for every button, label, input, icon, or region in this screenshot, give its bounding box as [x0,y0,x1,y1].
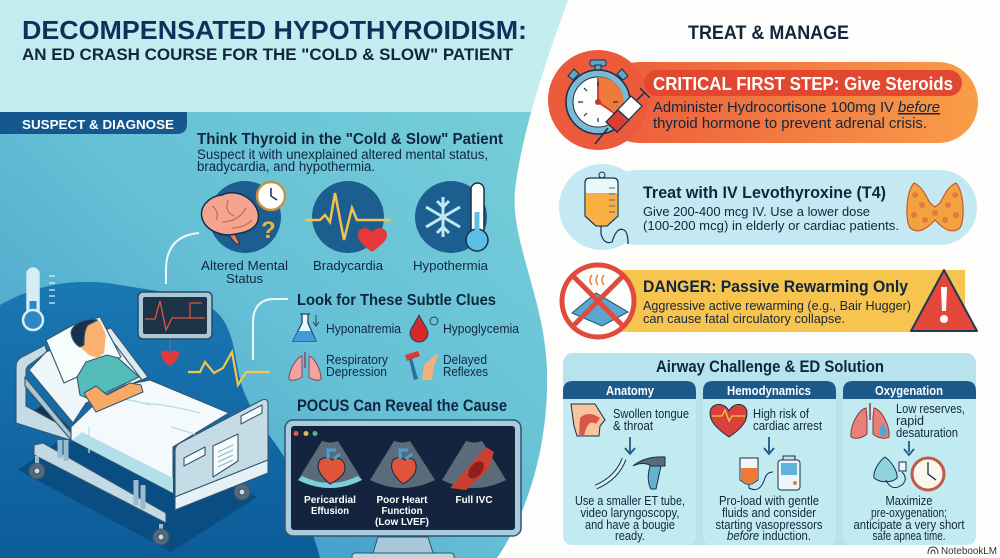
patient torso and head [77,355,139,398]
heading: treat and manage: TREAT & MANAGE [688,23,849,44]
column: anatomy: Swollen tongue [613,407,689,421]
clue list: Reflexes [443,364,488,379]
column: oxygenation: Maximize [886,494,933,508]
patient arm over blanket [84,383,143,412]
ultrasound labels: Pericardial [304,494,356,506]
column: anatomy: & throat [613,419,653,433]
panel: levothyroxine: Treat with IV Levothyroxine (T4) [643,183,886,202]
clue list: Respiratory [326,352,388,367]
column: oxygenation: desaturation [896,426,958,440]
arrow [764,437,774,454]
title: DECOMPENSATED HYPOTHYROIDISM: [22,15,527,45]
column: hemodynamics: Hemodynamics [727,384,811,398]
symptom labels: Status [226,271,263,286]
column: hemodynamics: fluids and consider [722,506,816,520]
icon: altered mental status: ? [261,217,276,244]
ultrasound view: pericardial effusion [298,441,362,488]
panel: levothyroxine [559,164,977,250]
arrow [625,437,635,454]
panel: levothyroxine: Give 200-400 mcg IV. Use a lower dose [643,204,870,219]
icon: heart with pulse [710,404,747,437]
icon: clock [912,458,944,490]
column: oxygenation: safe apnea time. [872,529,946,543]
clue list [289,314,520,380]
illustration: patient in hospital bed [16,317,268,552]
column: oxygenation: pre-oxygenation; [871,506,947,520]
heading: POCUS: POCUS Can Reveal the Cause [297,397,507,415]
column: anatomy: and have a bougie [585,518,675,532]
blanket [71,380,229,493]
icon: laryngoscope [633,457,665,489]
icon: thyroid gland [907,183,963,231]
clue list: Hypoglycemia [443,321,520,336]
panel: critical first step: Administer Hydrocortisone 100mg IV before [653,99,940,116]
heading: think thyroid: Suspect it with unexplained altered mental status, [197,147,488,162]
panel: critical first step: thyroid hormone to prevent adrenal crisis. [653,115,927,132]
head rail [16,345,70,440]
icon: ET tube [596,459,624,487]
clue list: Depression [326,364,387,379]
ultrasound view: poor heart function [370,441,435,488]
connector lines [166,233,288,360]
ultrasound labels: (Low LVEF) [375,516,429,528]
column: hemodynamics [703,381,836,545]
column: oxygenation: Oxygenation [875,384,943,398]
NotebookLM mark: NotebookLM [941,545,997,557]
footboard [175,400,268,497]
column: anatomy: video laryngoscopy, [580,506,680,520]
heading: think thyroid: bradycardia, and hypothermia. [197,159,375,174]
clue list: Hyponatremia [326,321,402,336]
bed base frame [34,443,166,523]
icon: flask [293,314,319,341]
icon: lungs [289,352,321,380]
panel: levothyroxine: (100-200 mcg) in elderly or cardiac patients. [643,218,899,233]
section banner: suspect and diagnose [0,112,187,134]
column: anatomy [563,381,696,545]
icon: prohibited rewarming blanket [562,265,634,337]
icon: hypothermia [415,181,488,253]
heading: subtle clues: Look for These Subtle Clues [297,292,496,309]
under-bed dark gap [29,403,70,438]
pillow [46,317,121,383]
panel: critical first step [548,50,978,150]
ultrasound labels: Full IVC [456,494,493,506]
panel: danger: Aggressive active rewarming (e.g., Bair Hugger) [643,298,911,313]
panel: danger [562,265,977,337]
symptom labels [201,258,489,286]
column: anatomy: Anatomy [606,384,654,398]
backrest mattress [29,328,148,423]
symptom labels: Hypothermia [413,258,489,273]
column: hemodynamics: Pro-load with gentle [719,494,819,508]
heading: think thyroid [197,131,504,174]
icon: airway profile [571,404,605,436]
column: hemodynamics: High risk of [753,407,809,421]
icon: IV fluids to vasopressor pump [740,456,800,490]
clue list: Delayed [443,352,487,367]
ultrasound labels [304,494,493,528]
clipboard [213,434,238,477]
icon: lungs with drop [851,403,889,438]
icon: IV bag [585,172,628,244]
title: AN ED CRASH COURSE FOR THE "COLD & SLOW" PATIENT [22,45,514,64]
ecg trace [188,352,270,385]
column: oxygenation [843,381,976,545]
backrest frame [25,377,71,440]
ultrasound labels: Poor Heart [376,494,428,506]
column: anatomy: ready. [615,529,645,543]
heading: think thyroid: Think Thyroid in the "Cold & Slow" Patient [197,131,504,148]
column: oxygenation: rapid [896,414,924,428]
column: oxygenation: anticipate a very short [854,518,965,532]
panel: airway challenge and ED solution: Airway Challenge & ED Solution [656,358,884,376]
title [22,15,527,64]
column: hemodynamics: before induction. [727,529,811,543]
symptom labels: Altered Mental [201,258,288,273]
ultrasound monitor [285,420,521,558]
column: hemodynamics: cardiac arrest [753,419,822,433]
panel: danger: can cause fatal circulatory collapse. [643,311,845,326]
column: oxygenation: Low reserves, [896,402,965,416]
icon: bradycardia [305,181,391,253]
column: hemodynamics: starting vasopressors [716,518,822,532]
icon: stopwatch and syringe [566,60,650,144]
ultrasound labels: Function [382,505,422,517]
column: anatomy: Use a smaller ET tube, [575,494,685,508]
arrow [904,441,914,455]
panel: critical first step: CRITICAL FIRST STEP: Give Steroids [653,74,953,94]
icon: altered mental status [202,181,285,253]
icon: oxygen mask [874,457,906,488]
ultrasound view: full IVC [442,441,506,490]
icon: reflex hammer and hand [405,351,438,380]
panel: danger: DANGER: Passive Rewarming Only [643,277,908,296]
white right panel [497,0,1000,558]
panel: airway challenge and ED solution [563,353,976,545]
icon: bedside heart monitor [138,292,212,366]
icon: blood drop [410,315,438,342]
ultrasound labels: Effusion [311,505,349,517]
icon: warning triangle [911,270,977,331]
icon: wall thermometer [23,268,55,330]
section banner: suspect and diagnose: SUSPECT & DIAGNOSE [22,117,174,132]
symptom labels: Bradycardia [313,258,384,273]
